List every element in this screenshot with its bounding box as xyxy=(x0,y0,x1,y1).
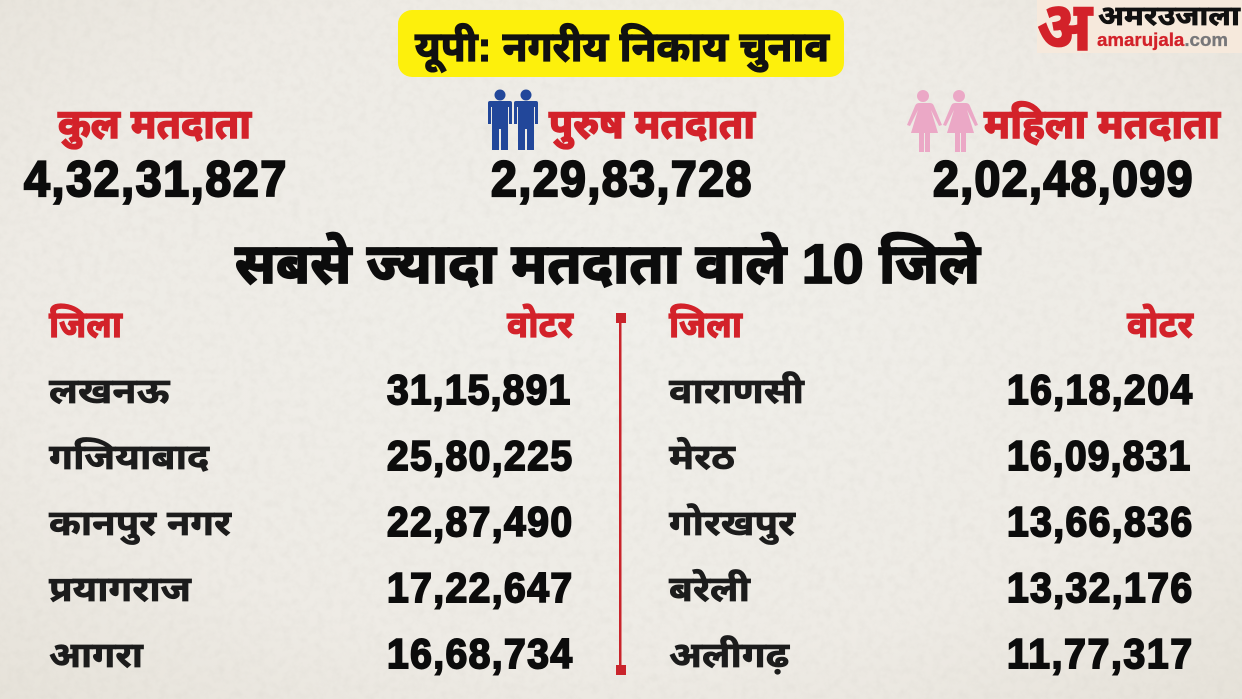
stat: total voters: 4,32,31,827 xyxy=(24,151,286,207)
table: left column: आगरा xyxy=(49,636,144,675)
logo: Amar Ujala: amarujala.com xyxy=(1097,30,1228,50)
stat: female voters xyxy=(907,90,1221,207)
table: right column: 16,18,204 xyxy=(1007,366,1192,413)
stat: male voters xyxy=(488,90,756,207)
table: right column: मेरठ xyxy=(669,437,736,477)
table: left column: जिला xyxy=(49,304,123,345)
icon: two men xyxy=(488,90,538,150)
table: left column: 25,80,225 xyxy=(387,432,572,479)
logo: Amar Ujala xyxy=(1037,0,1242,65)
stat: male voters: पुरुष मतदाता xyxy=(549,101,756,149)
table: left column: 16,68,734 xyxy=(387,630,572,677)
table: right column: 16,09,831 xyxy=(1007,432,1190,479)
table: left column: 17,22,647 xyxy=(387,564,572,611)
stat: female voters: 2,02,48,099 xyxy=(933,151,1192,207)
table: right column: वोटर xyxy=(1127,304,1194,345)
table: right column: 13,66,836 xyxy=(1007,498,1192,545)
table: left column: गजियाबाद xyxy=(49,437,210,477)
logo: Amar Ujala: अमरउजाला xyxy=(1098,1,1241,31)
icon: two women xyxy=(907,90,978,152)
table: left column: कानपुर नगर xyxy=(49,504,232,545)
stat: total voters: कुल मतदाता xyxy=(58,101,252,149)
table: right column: वाराणसी xyxy=(669,371,805,411)
heading: top 10 districts: सबसे ज्यादा मतदाता वाले 10 जिले xyxy=(235,232,982,295)
stat: total voters xyxy=(24,101,286,207)
stat: female voters: महिला मतदाता xyxy=(984,101,1221,147)
stat: male voters: 2,29,83,728 xyxy=(491,151,751,207)
table: right column: जिला xyxy=(669,304,743,345)
title banner xyxy=(398,10,844,77)
table: right column: 13,32,176 xyxy=(1007,564,1192,611)
table: right column: बरेली xyxy=(669,569,751,609)
table: left column: 31,15,891 xyxy=(387,366,570,413)
table: left column xyxy=(49,304,574,677)
title banner: यूपी: नगरीय निकाय चुनाव xyxy=(415,23,830,73)
table: left column: 22,87,490 xyxy=(387,498,572,545)
table: left column: लखनऊ xyxy=(49,372,170,411)
table: right column: गोरखपुर xyxy=(669,503,796,545)
table: left column: वोटर xyxy=(507,304,574,345)
table: right column xyxy=(669,304,1194,677)
table: right column: 11,77,317 xyxy=(1007,630,1192,677)
table: left column: प्रयागराज xyxy=(49,570,193,609)
column divider xyxy=(616,313,626,675)
table: right column: अलीगढ़ xyxy=(669,635,790,675)
